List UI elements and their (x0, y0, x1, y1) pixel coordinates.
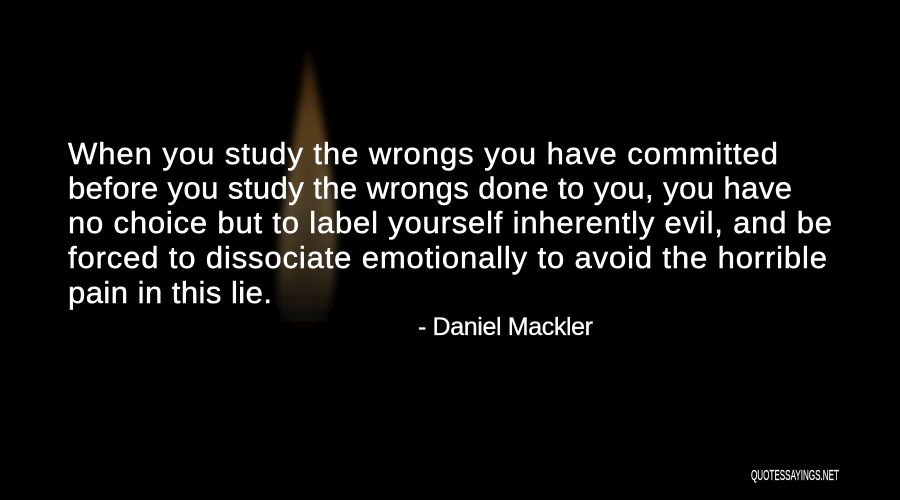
quote text: pain in this lie. (68, 275, 272, 310)
quote text: before you study the wrongs done to you, you have (68, 170, 792, 206)
quote text: When you study the wrongs you have committed (68, 136, 778, 171)
attribution: - Daniel Mackler (418, 313, 593, 341)
icon: candle flame (278, 42, 336, 325)
quote text (68, 136, 832, 310)
quote text: forced to dissociate emotionally to avoid the horrible (68, 240, 827, 275)
quote text: no choice but to label yourself inherently evil, and be (68, 205, 832, 240)
